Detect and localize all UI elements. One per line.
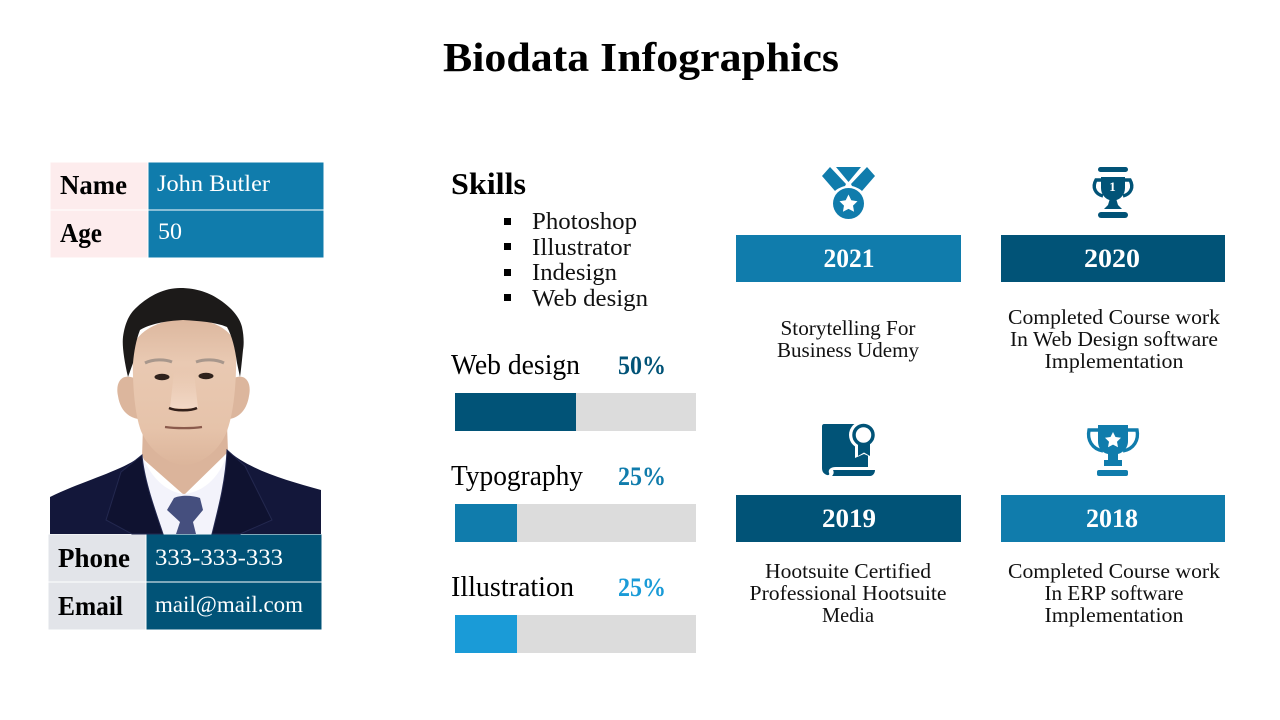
name label cell: [50, 162, 148, 210]
year box 2018: [1001, 495, 1225, 542]
year box 2019: 2019: [822, 504, 876, 533]
phone value cell: 333-333-333: [155, 545, 283, 571]
skill bar: illustration: [451, 572, 696, 653]
age label cell: [50, 210, 148, 258]
email label cell: Email: [58, 591, 123, 621]
text: 2020 achievement: In Web Design software: [1010, 327, 1218, 351]
eyebrows: [145, 360, 172, 363]
year box 2018: 2018: [1086, 504, 1138, 533]
skill bar: web design: Web design: [451, 350, 580, 381]
icon: certificate book: [822, 421, 877, 476]
panel: phone and email table: [48, 534, 322, 630]
text: 2018 achievement: Completed Course work: [1008, 559, 1221, 583]
text: 2020 achievement: Completed Course work: [1008, 305, 1221, 329]
email label cell: [48, 582, 146, 630]
age value cell: 50: [158, 219, 182, 245]
heading: skills: Skills: [451, 166, 526, 201]
skill bar: typography: 25%: [618, 462, 666, 491]
portrait photo: [50, 288, 321, 534]
shirt: [142, 450, 228, 534]
skills list: [504, 208, 648, 312]
panel: name and age table: [50, 162, 324, 258]
skill bar: illustration: Illustration: [451, 572, 574, 603]
icon: trophy number one: 1: [1109, 179, 1116, 194]
eyes: [154, 374, 170, 380]
name value cell: [148, 162, 324, 210]
age label cell: Age: [60, 218, 102, 248]
text: 2021 achievement: [777, 316, 920, 362]
name label cell: Name: [60, 170, 127, 200]
icon: trophy number one: [1094, 167, 1132, 218]
icon: trophy star: [1089, 425, 1137, 476]
skill bar: typography: [451, 461, 696, 542]
jacket: [50, 455, 163, 534]
skill bar: illustration: 25%: [618, 573, 666, 602]
skill bar: typography: Typography: [451, 461, 583, 492]
year box 2021: [736, 235, 961, 282]
text: 2018 achievement: In ERP software: [1044, 581, 1184, 605]
neck: [142, 425, 228, 495]
hair: [123, 288, 244, 377]
text: 2019 achievement: Media: [822, 603, 875, 627]
phone label cell: Phone: [58, 543, 130, 573]
text: 2020 achievement: [1008, 305, 1221, 373]
skills list: Web design: [532, 285, 648, 312]
skills list: Illustrator: [532, 234, 631, 261]
phone value cell: [146, 534, 322, 582]
text: 2020 achievement: Implementation: [1044, 349, 1184, 373]
text: 2019 achievement: [750, 559, 946, 627]
year box 2020: 2020: [1084, 244, 1140, 273]
lapels: [106, 450, 272, 534]
email value cell: mail@mail.com: [155, 592, 303, 618]
year box 2021: 2021: [824, 244, 874, 273]
email value cell: [146, 582, 322, 630]
skills list: Indesign: [532, 259, 617, 286]
age value cell: [148, 210, 324, 258]
nose bridge: [170, 372, 198, 408]
skills list: Photoshop: [532, 208, 637, 235]
tie: [167, 496, 203, 534]
text: 2021 achievement: Storytelling For: [780, 316, 916, 340]
text: 2019 achievement: Professional Hootsuite: [750, 581, 946, 605]
name value cell: John Butler: [157, 171, 270, 197]
text: 2018 achievement: Implementation: [1044, 603, 1184, 627]
year box 2019: [736, 495, 961, 542]
skill bar: web design: 50%: [618, 351, 666, 380]
nose: [169, 408, 197, 410]
skill bar: web design: [451, 350, 696, 431]
mouth: [165, 427, 202, 428]
phone label cell: [48, 534, 146, 582]
icon: medal: [822, 167, 875, 219]
ears: [117, 377, 138, 419]
text: 2019 achievement: Hootsuite Certified: [765, 559, 932, 583]
text: 2021 achievement: Business Udemy: [777, 338, 920, 362]
text: 2018 achievement: [1008, 559, 1221, 627]
face: [133, 319, 236, 465]
year box 2020: [1001, 235, 1225, 282]
title: Biodata Infographics: [443, 34, 839, 80]
